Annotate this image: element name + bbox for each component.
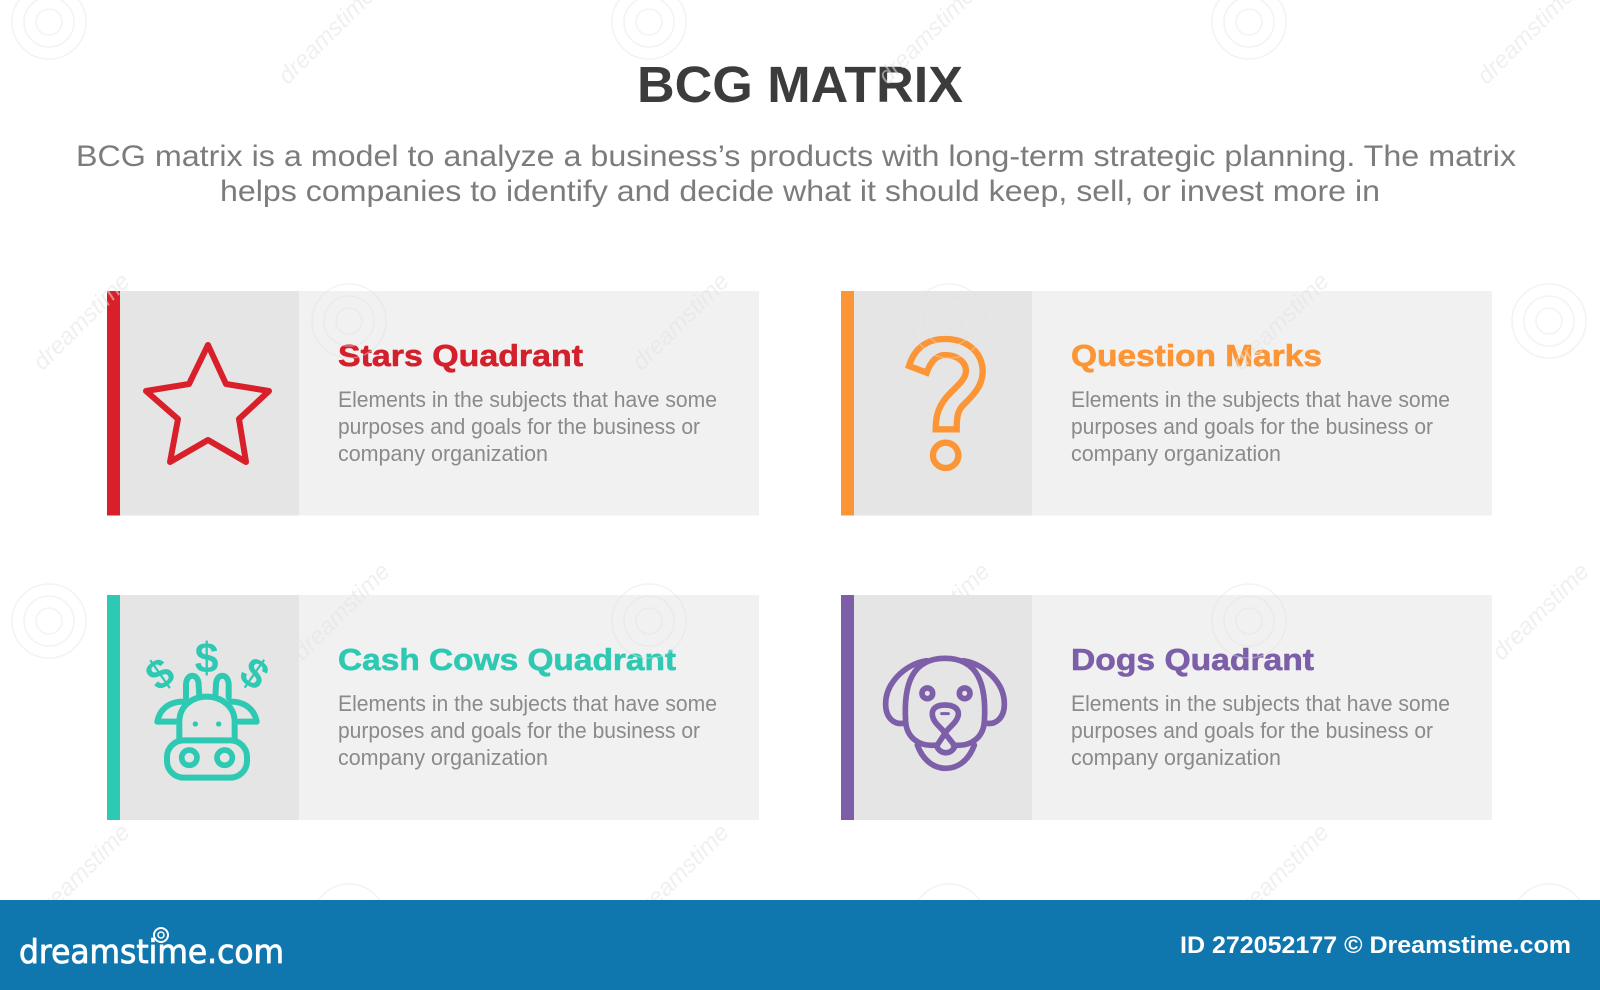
text block: stars description: company organization: [338, 441, 548, 466]
heading: question marks: Question Marks: [1071, 338, 1322, 373]
text block: dogs description: Elements in the subjects that have some: [1071, 691, 1450, 716]
text block: question marks description: Elements in the subjects that have some: [1071, 387, 1450, 412]
text block: dogs description: purposes and goals for the business or: [1071, 718, 1433, 743]
subtitle text: BCG matrix is a model to analyze a business’s products with long-term strategic planning. The matrix: [76, 140, 1516, 173]
icon: dog face: [886, 658, 1004, 768]
text block: dogs description: company organization: [1071, 745, 1281, 770]
heading: dogs quadrant: Dogs Quadrant: [1071, 642, 1314, 677]
icon: question mark: [909, 339, 983, 468]
infographic canvas: dreamstime: [1487, 558, 1595, 666]
text block: stars description: Elements in the subjects that have some: [338, 387, 717, 412]
footer logo: dreamstime: dreamstime.com: [19, 932, 284, 971]
infographic canvas: dreamstime: [1227, 819, 1335, 927]
infographic canvas: dreamstime: [627, 819, 735, 927]
infographic canvas: dreamstime: [28, 819, 136, 927]
title: BCG MATRIX: [637, 56, 963, 113]
text block: cash cows description: company organization: [338, 745, 548, 770]
text block: question marks description: [1071, 387, 1450, 466]
text block: question marks description: purposes and goals for the business or: [1071, 414, 1433, 439]
heading: stars quadrant: Stars Quadrant: [338, 338, 583, 373]
text block: stars description: [338, 387, 717, 466]
icon: cow with dollar signs: $: [137, 648, 183, 700]
icon: star: [146, 345, 269, 462]
footer bar: [0, 900, 1600, 990]
panel: question marks: [841, 291, 1492, 516]
panel: stars quadrant: [107, 291, 759, 516]
infographic canvas: dreamstime: [1227, 268, 1335, 376]
text block: cash cows description: [338, 691, 717, 770]
infographic canvas: dreamstime: [888, 558, 996, 666]
text block: cash cows description: Elements in the subjects that have some: [338, 691, 717, 716]
text block: question marks description: company organization: [1071, 441, 1281, 466]
icon: cow with dollar signs: [137, 635, 278, 778]
infographic canvas: dreamstime: [288, 558, 396, 666]
heading: cash cows quadrant: Cash Cows Quadrant: [338, 642, 676, 677]
panel: cash cows quadrant: [107, 595, 759, 820]
subtitle text: [76, 140, 1516, 208]
infographic canvas: dreamstime: [627, 268, 735, 376]
text block: stars description: purposes and goals for the business or: [338, 414, 700, 439]
panel: dogs quadrant: [841, 595, 1492, 820]
footer credit: ID 272052177 © Dreamstime.com: [1180, 932, 1571, 959]
infographic canvas: dreamstime: [28, 268, 136, 376]
text block: cash cows description: purposes and goals for the business or: [338, 718, 700, 743]
text block: dogs description: [1071, 691, 1450, 770]
icon: cow with dollar signs: $: [232, 647, 278, 699]
subtitle text: helps companies to identify and decide what it should keep, sell, or invest more in: [220, 175, 1380, 208]
icon: cow with dollar signs: $: [195, 635, 219, 683]
